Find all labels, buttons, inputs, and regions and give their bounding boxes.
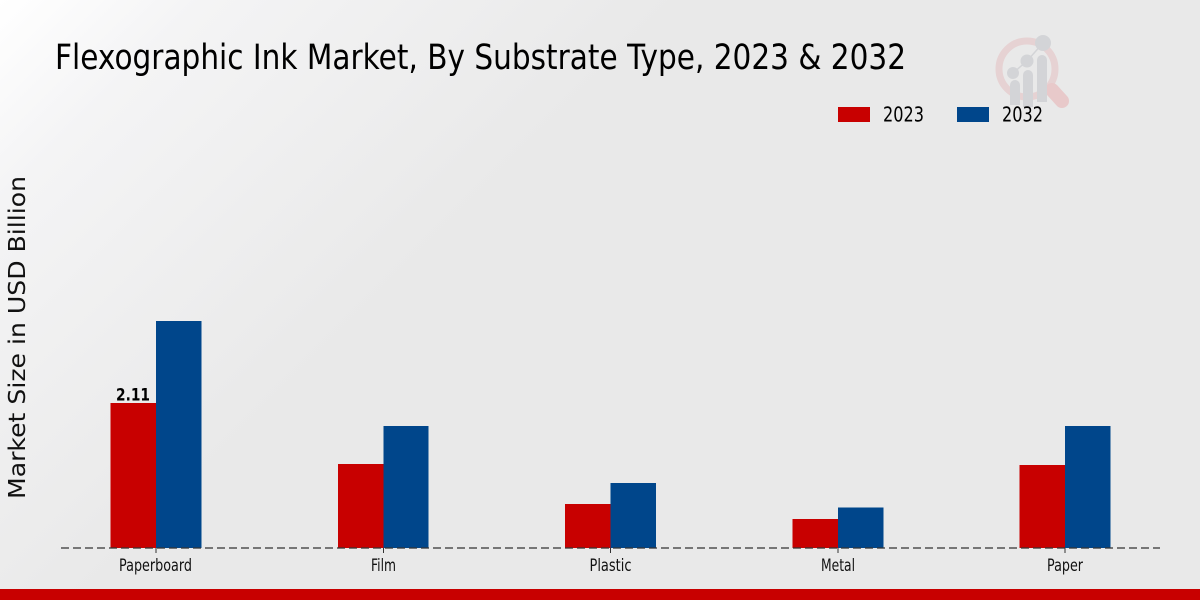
category labels xyxy=(119,548,1083,575)
legend item: 2032: 2032 xyxy=(1002,102,1043,126)
data label: 2.11 xyxy=(116,386,150,404)
category labels: Paper xyxy=(1047,556,1083,575)
category labels: Film xyxy=(371,556,396,575)
legend xyxy=(838,102,1043,126)
legend item: 2032 xyxy=(957,102,1043,126)
bar chart xyxy=(61,321,1160,575)
legend item: 2023: 2023 xyxy=(883,102,924,126)
bars: Paper xyxy=(1020,426,1110,548)
category labels: Paperboard xyxy=(119,556,192,575)
legend item: 2023 xyxy=(838,102,924,126)
y axis label: Market Size in USD Billion xyxy=(3,176,31,499)
bars: Paperboard xyxy=(110,321,202,548)
title: Flexographic Ink Market, By Substrate Type, 2023 & 2032 xyxy=(55,38,906,78)
bars: Metal xyxy=(792,508,884,548)
bars: Film xyxy=(338,426,428,548)
watermark logo xyxy=(999,35,1062,107)
bottom bar xyxy=(0,589,1200,600)
bars: Plastic xyxy=(565,483,656,548)
category labels: Metal xyxy=(821,556,855,575)
category labels: Plastic xyxy=(590,556,632,575)
